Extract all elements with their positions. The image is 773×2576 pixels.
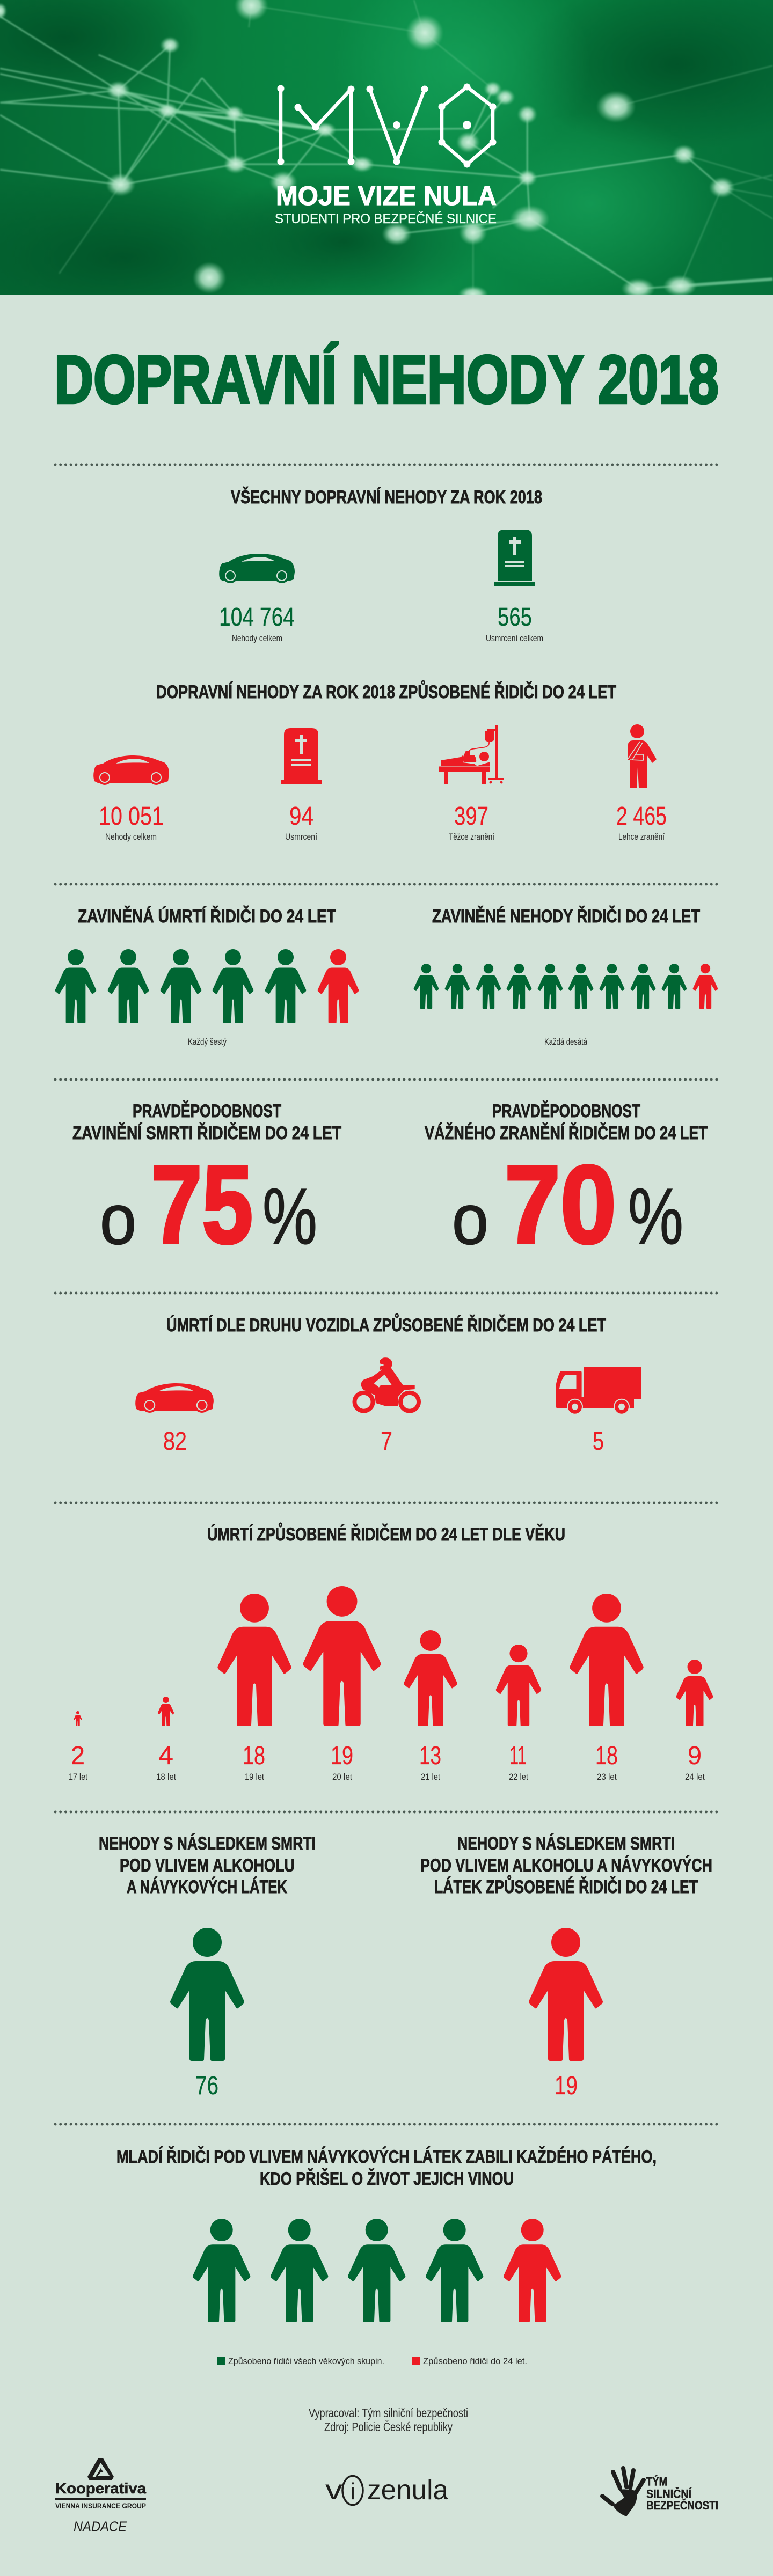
logo: Kooperativa: Kooperativa — [55, 2480, 146, 2497]
heading: NEHODY S NÁSLEDKEM SMRTI — [457, 1833, 675, 1854]
age 18: 18 let — [156, 1772, 176, 1782]
logo: Tým silniční bezpečnosti: TÝM — [646, 2475, 667, 2489]
age 21: 21 let — [421, 1772, 440, 1782]
logo: Kooperativa: VIENNA INSURANCE GROUP — [55, 2502, 146, 2510]
icon: injured person with sling — [628, 724, 657, 788]
heading: LÁTEK ZPŮSOBENÉ ŘIDIČI DO 24 LET — [434, 1875, 698, 1897]
age 17 — [69, 1742, 87, 1782]
header banner with network background — [0, 0, 773, 295]
heading: DOPRAVNÍ NEHODY ZA ROK 2018 ZPŮSOBENÉ ŘIDIČI DO 24 LET — [156, 680, 616, 702]
icon: red car — [93, 755, 169, 785]
heading — [72, 1101, 341, 1143]
icon: green gravestone — [494, 530, 535, 586]
big stat: 70 percent: o — [452, 1180, 488, 1259]
stat: 19 — [555, 2072, 578, 2100]
panel: accidents caused, every tenth — [414, 906, 718, 1047]
panel: deaths by vehicle type — [135, 1313, 641, 1456]
logo: MVO Moje vize nula — [275, 84, 497, 226]
icon: hand print — [602, 2468, 644, 2516]
age 21 — [419, 1742, 441, 1782]
stat: total deaths — [486, 603, 543, 643]
stat: deaths — [285, 802, 317, 842]
age 22 — [509, 1742, 528, 1782]
age 17: 17 let — [69, 1772, 87, 1782]
logo: Tým silniční bezpečnosti: BEZPEČNOSTI — [646, 2499, 718, 2512]
stat: light injuries: Lehce zranění — [618, 832, 665, 842]
heading — [99, 1833, 316, 1897]
age 19 — [243, 1742, 265, 1782]
logo: Kooperativa — [55, 2458, 146, 2535]
heading — [116, 2146, 657, 2189]
panel: accidents caused by drivers up to 24 — [93, 680, 667, 842]
age 17: 2 — [71, 1742, 85, 1770]
stat: car deaths: 82 — [163, 1427, 187, 1456]
big stat: 70 percent — [452, 1143, 683, 1266]
stat: truck deaths: 5 — [593, 1427, 604, 1456]
age 19: 19 let — [245, 1772, 264, 1782]
legend — [217, 2356, 527, 2366]
big stat: 75 percent — [100, 1143, 317, 1266]
heading: ÚMRTÍ DLE DRUHU VOZIDLA ZPŮSOBENÉ ŘIDIČEM DO 24 LET — [166, 1313, 606, 1335]
stat: deaths: Usmrcení — [285, 832, 317, 842]
logo: vizenula: v — [325, 2475, 342, 2506]
age 21: 13 — [419, 1742, 441, 1770]
stat: total deaths: 565 — [498, 603, 532, 632]
icon: red person — [529, 1928, 603, 2061]
stat: deaths: 94 — [289, 802, 313, 831]
caption: Každý šestý — [188, 1037, 227, 1047]
pictogram: ten people — [414, 964, 718, 1009]
legend: Způsobeno řidiči do 24 let. — [423, 2356, 527, 2366]
heading: ZAVINĚNÁ ÚMRTÍ ŘIDIČI DO 24 LET — [78, 906, 336, 927]
pictogram: five people — [193, 2219, 561, 2322]
panel: fatal accidents under influence, drivers up to 24 — [420, 1833, 712, 2100]
panel: deaths caused, every sixth — [55, 906, 359, 1047]
icon: patient in hospital bed — [439, 725, 504, 784]
heading: PRAVDĚPODOBNOST — [133, 1101, 281, 1121]
icon: truck — [556, 1367, 641, 1415]
stat: light injuries — [616, 802, 667, 842]
logo: Tým silniční bezpečnosti: SILNIČNÍ — [646, 2487, 692, 2501]
logo: vizenula — [325, 2475, 448, 2506]
credits: Vypracoval: Tým silniční bezpečnosti — [309, 2406, 468, 2420]
panel: deaths by age — [69, 1523, 713, 1782]
panel: young drivers killed every fifth — [116, 2146, 657, 2366]
stat: light injuries: 2 465 — [616, 802, 667, 831]
age 20: 20 let — [332, 1772, 352, 1782]
heading: VÁŽNÉHO ZRANĚNÍ ŘIDIČEM DO 24 LET — [425, 1122, 708, 1143]
big stat: 75 percent: % — [262, 1172, 317, 1261]
logo name: MOJE VIZE NULA — [276, 181, 497, 211]
stat: accidents — [99, 802, 164, 842]
heading — [420, 1833, 712, 1897]
age 19: 18 — [243, 1742, 265, 1770]
stat: serious injuries: Těžce zranění — [449, 832, 494, 842]
icon: green car — [219, 554, 295, 583]
heading: PRAVDĚPODOBNOST — [492, 1101, 640, 1121]
heading: POD VLIVEM ALKOHOLU — [120, 1855, 295, 1876]
credits — [309, 2406, 468, 2434]
panel: probability of serious injury — [425, 1101, 708, 1266]
logo: vizenula: i — [350, 2478, 355, 2505]
age chart: people scaled by deaths — [74, 1586, 713, 1726]
stat: serious injuries — [449, 802, 494, 842]
age 23 — [595, 1742, 618, 1782]
caption: Každá desátá — [544, 1037, 587, 1047]
heading: ZAVINĚNÉ NEHODY ŘIDIČI DO 24 LET — [432, 906, 700, 927]
panel: probability of causing death — [72, 1101, 341, 1266]
age 22: 22 let — [509, 1772, 528, 1782]
stat: total accidents: Nehody celkem — [232, 633, 282, 643]
age 18: 4 — [158, 1742, 173, 1770]
age 20: 19 — [331, 1742, 353, 1770]
age 24: 24 let — [685, 1772, 705, 1782]
age 24 — [685, 1742, 705, 1782]
heading: A NÁVYKOVÝCH LÁTEK — [127, 1877, 287, 1897]
heading: VŠECHNY DOPRAVNÍ NEHODY ZA ROK 2018 — [231, 487, 542, 508]
icon: car — [135, 1383, 214, 1413]
heading: NEHODY S NÁSLEDKEM SMRTI — [99, 1833, 316, 1854]
stat: motorcycle deaths: 7 — [381, 1427, 392, 1456]
credits: Zdroj: Policie České republiky — [324, 2419, 453, 2434]
icon: motorcycle — [354, 1357, 419, 1411]
icon: red gravestone — [281, 728, 322, 784]
big stat: 70 percent: % — [628, 1172, 683, 1261]
icon: green person — [170, 1928, 244, 2061]
age 22: 11 — [509, 1742, 527, 1770]
logo triangle — [87, 2458, 114, 2480]
heading: KDO PŘIŠEL O ŽIVOT JEJICH VINOU — [260, 2168, 514, 2189]
legend: Způsobeno řidiči všech věkových skupin. — [228, 2356, 384, 2366]
big stat: 70 percent: 70 — [505, 1143, 616, 1266]
age 20 — [331, 1742, 353, 1782]
logo mark — [277, 84, 496, 167]
logo: Kooperativa: NADACE — [74, 2519, 127, 2535]
stat: accidents: Nehody celkem — [105, 832, 157, 842]
logo tagline: STUDENTI PRO BEZPEČNÉ SILNICE — [275, 211, 497, 226]
stat: total accidents: 104 764 — [219, 603, 295, 632]
panel: all accidents 2018 — [219, 487, 543, 643]
age 23: 18 — [595, 1742, 618, 1770]
stat: total deaths: Usmrcení celkem — [486, 633, 543, 643]
logo: Tým silniční bezpečnosti — [602, 2468, 718, 2516]
stat: total accidents — [219, 603, 295, 643]
age 18 — [156, 1742, 176, 1782]
stat: serious injuries: 397 — [454, 802, 488, 831]
pictogram: six people — [55, 949, 359, 1023]
logo: vizenula: zenula — [367, 2475, 448, 2506]
stat: 76 — [195, 2072, 218, 2100]
big stat: 75 percent: 75 — [151, 1143, 253, 1266]
age 24: 9 — [688, 1742, 702, 1770]
heading: ÚMRTÍ ZPŮSOBENÉ ŘIDIČEM DO 24 LET DLE VĚKU — [207, 1523, 565, 1545]
heading: ZAVINĚNÍ SMRTI ŘIDIČEM DO 24 LET — [72, 1122, 341, 1143]
big stat: 75 percent: o — [100, 1180, 136, 1259]
stat: accidents: 10 051 — [99, 802, 164, 831]
heading — [425, 1101, 708, 1143]
panel: fatal accidents under influence, all drivers — [99, 1833, 316, 2100]
age 23: 23 let — [597, 1772, 617, 1782]
